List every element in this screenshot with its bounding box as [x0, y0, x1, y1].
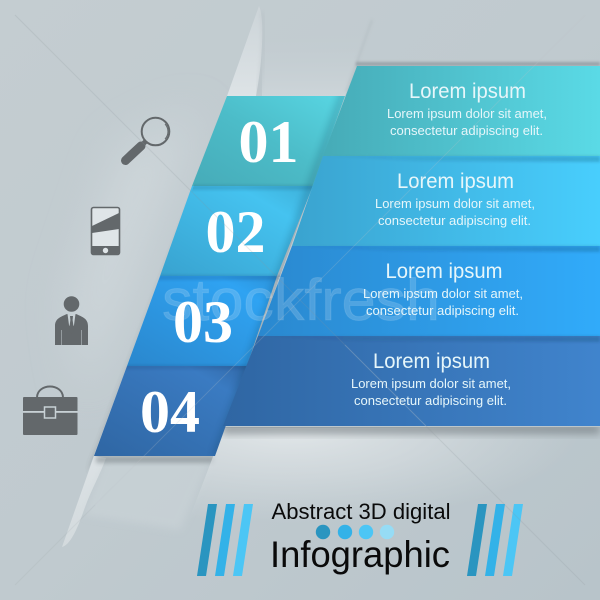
footer title: Infographic	[270, 534, 450, 575]
text block 3: Lorem ipsum dolor sit amet,	[363, 286, 523, 301]
text ribbon 1	[323, 66, 600, 156]
text block 4: consectetur adipiscing elit.	[354, 393, 507, 408]
lower paper strip	[62, 424, 600, 547]
upper paper strip	[227, 6, 372, 96]
text block 1: Lorem ipsum	[409, 80, 526, 103]
number labels: 03	[173, 289, 233, 355]
number ribbon 02	[160, 186, 313, 276]
number ribbon 03	[127, 276, 277, 366]
footer slashes left	[197, 504, 253, 576]
text block 2: consectetur adipiscing elit.	[378, 213, 531, 228]
icon: briefcase	[23, 386, 78, 435]
text block 4: Lorem ipsum	[373, 350, 490, 373]
icon: businessman	[55, 296, 88, 345]
text block 1: consectetur adipiscing elit.	[390, 123, 543, 138]
footer slashes right	[467, 504, 523, 576]
top shadow above first ribbon	[356, 62, 600, 66]
footer dots	[316, 525, 394, 539]
number labels: 02	[206, 199, 266, 265]
paper slit shadow along the bars	[88, 336, 138, 468]
number ribbon 04	[94, 366, 247, 456]
number labels	[140, 109, 298, 445]
text block 1: Lorem ipsum dolor sit amet,	[387, 106, 547, 121]
text ribbon 3	[258, 246, 600, 336]
text block 4: Lorem ipsum dolor sit amet,	[351, 376, 511, 391]
number labels: 04	[140, 379, 200, 445]
icon: smartphone	[92, 208, 120, 254]
text block 1	[387, 80, 547, 138]
text ribbon 2	[292, 156, 600, 246]
text block 4	[351, 350, 511, 408]
ribbon shadows	[258, 156, 600, 342]
text ribbon 4	[223, 336, 600, 426]
number labels: 01	[238, 109, 298, 175]
text block 3: Lorem ipsum	[386, 260, 502, 283]
text block 2	[375, 170, 535, 228]
text block 2: Lorem ipsum dolor sit amet,	[375, 196, 535, 211]
icon: magnifying glass	[126, 118, 169, 160]
number ribbon 01	[192, 96, 345, 186]
watermark: stockfresh	[162, 268, 440, 333]
text block 3	[363, 260, 523, 318]
ribbon drop shadows	[120, 80, 351, 456]
text block 3: consectetur adipiscing elit.	[366, 303, 519, 318]
footer heading: Abstract 3D digital	[272, 499, 450, 524]
panel: number ribbons	[94, 80, 351, 456]
text block 2: Lorem ipsum	[397, 170, 514, 193]
panel: text ribbons	[223, 66, 600, 426]
